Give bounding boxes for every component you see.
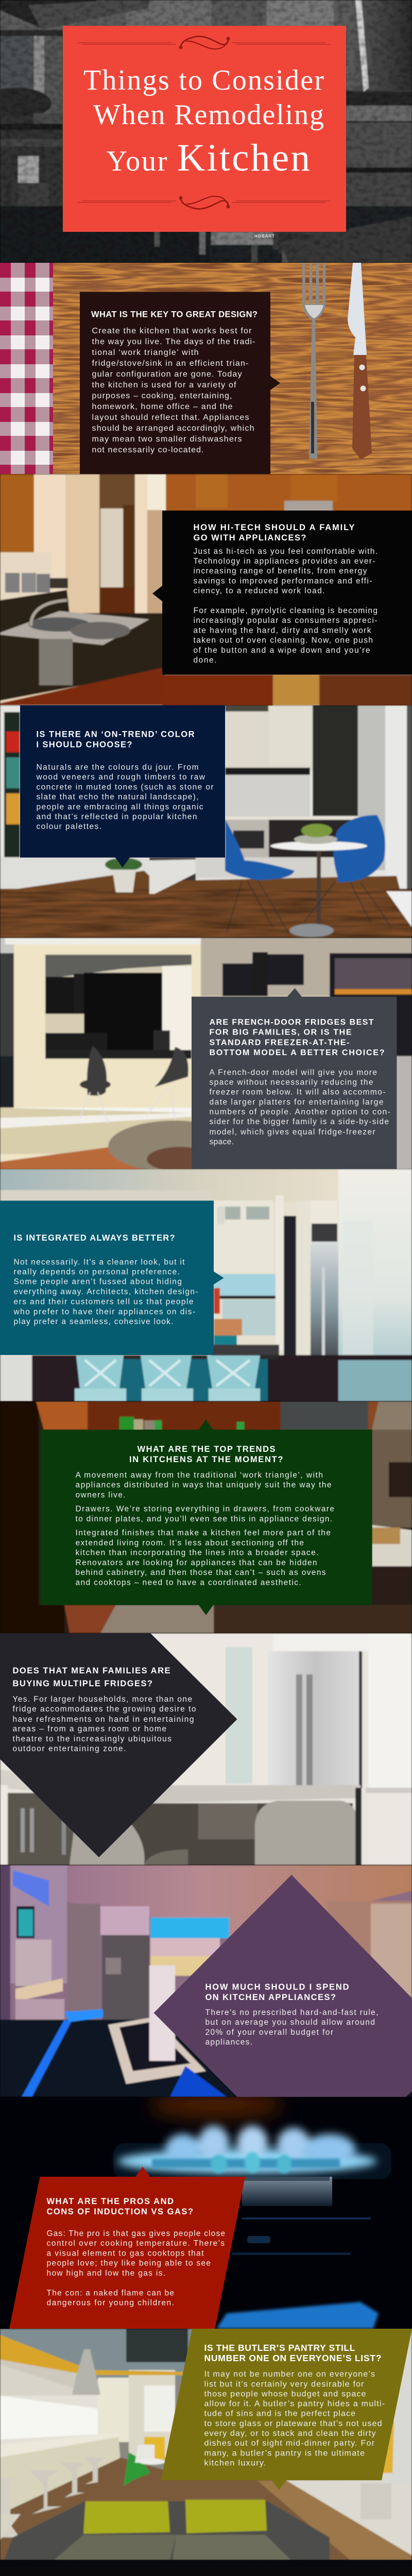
heading: HOW HI-TECH SHOULD A FAMILY (194, 523, 354, 532)
body text: people love; they like being able to see (46, 2259, 211, 2268)
arrow (214, 1272, 224, 1284)
body text: a visual element to gas cooktops that (46, 2249, 204, 2258)
heading: IS INTEGRATED ALWAYS BETTER? (13, 1233, 175, 1243)
heading: FOR BIG FAMILIES, OR IS THE (209, 1028, 352, 1037)
heading: GO WITH APPLIANCES? (194, 533, 306, 543)
body text (92, 327, 255, 454)
body text: model, which gives equal fridge-freezer (209, 1128, 375, 1137)
section: french-door fridges (0, 938, 412, 1172)
heading: NUMBER ONE ON EVERYONE’S LIST? (204, 2353, 381, 2363)
body text: ers and their customers tell us that people (13, 1297, 194, 1307)
heading: IS THE BUTLER’S PANTRY STILL (204, 2343, 355, 2353)
body text: Yes. For larger households, more than one (12, 1695, 192, 1704)
body text: people are embracing all things organic (36, 803, 203, 811)
heading: HOW MUCH SHOULD I SPEND (205, 1982, 349, 1992)
body text: 20% of your overall budget for (205, 2028, 333, 2037)
photo: industrial kitchen (0, 0, 412, 263)
panel: on-trend color (20, 705, 225, 868)
panel: great design (80, 292, 280, 474)
body text (13, 1258, 198, 1326)
photo: office kitchen with yellow sofa cushions (0, 2329, 412, 2560)
body text (12, 1695, 196, 1753)
body text: slate that echo the natural landscape), (36, 792, 199, 802)
arrow down (199, 1605, 213, 1615)
body text: who prefer to have their appliances on dis- (13, 1308, 195, 1316)
body text: outdoor entertaining zone. (12, 1744, 126, 1753)
photo: white kitchen with steel fridge (0, 1633, 412, 1865)
photo: modern kitchen with blue chairs (0, 705, 412, 938)
body text: space. (209, 1138, 234, 1146)
heading: BOTTOM MODEL A BETTER CHOICE? (209, 1048, 384, 1057)
body text: may mean two smaller dishwashers (92, 435, 242, 444)
body text: space without necessarily reducing the (209, 1078, 373, 1087)
arrow (270, 376, 280, 390)
body text: kitchen luxury. (204, 2459, 266, 2468)
body text: There’s no prescribed hard-and-fast rule, (205, 2008, 378, 2017)
heading: ON KITCHEN APPLIANCES? (205, 1993, 336, 2002)
body text: behind cabinetry, and then those that can’t – such as ovens (75, 1568, 326, 1577)
heading: WHAT IS THE KEY TO GREAT DESIGN? (91, 310, 258, 319)
heading: WHAT ARE THE PROS AND (46, 2197, 174, 2206)
body text (75, 1471, 334, 1587)
arrow up (199, 1420, 213, 1430)
body text: It may not be number one on everyone’s (204, 2370, 375, 2379)
bottom ornament (77, 196, 331, 209)
body text: control over cooking temperature. There’s (46, 2239, 225, 2248)
body text (194, 547, 377, 665)
body text: sider for the bigger family is a side-by-side (209, 1117, 389, 1126)
body text: For example, pyrolytic cleaning is becoming (194, 606, 377, 615)
section: top trends (0, 1401, 412, 1633)
photo: wooden table (0, 263, 412, 474)
heading (205, 1982, 349, 2002)
body text: extended living room. It’s less about sectioning off the (75, 1538, 304, 1548)
heading (194, 523, 354, 543)
section: integrated (0, 1169, 412, 1401)
body text: should be arranged accordingly, which (92, 424, 254, 433)
heading: IS THERE AN ‘ON-TREND’ COLOR (36, 730, 195, 739)
section: butler's pantry (0, 2329, 412, 2560)
arrow (287, 988, 302, 996)
body text (46, 2229, 225, 2307)
body text (36, 763, 213, 831)
photo: industrial kitchen: HOBART (254, 234, 274, 239)
body text: Create the kitchen that works best for (92, 327, 252, 335)
photo: white and teal kitchen (0, 1169, 412, 1401)
section: induction vs gas (0, 2090, 412, 2329)
body text (205, 2008, 378, 2046)
section: footer (0, 2560, 412, 2576)
body text: Not necessarily. It’s a cleaner look, but it (13, 1258, 185, 1266)
body text: allow for it. A butler’s pantry hides a multi- (204, 2400, 385, 2408)
body text: tude of sins and is the perfect place (204, 2409, 355, 2418)
body text: done. (194, 656, 216, 665)
panel: top trends (40, 1420, 372, 1615)
body text: Just as hi-tech as you feel comfortable with. (194, 547, 377, 556)
body text: appliances. (205, 2038, 252, 2046)
section: key to great design (0, 263, 412, 474)
title text: Kitchen (177, 137, 310, 179)
body text: ciency, to a reduced work load. (194, 586, 324, 596)
body text: dishes out of sight mid-dinner party. For (204, 2439, 375, 2448)
heading: DOES THAT MEAN FAMILIES ARE (12, 1666, 170, 1675)
body text: not necessarily co-located. (92, 446, 204, 454)
body text: A movement away from the traditional ‘work triangle’, with (75, 1471, 323, 1480)
arrow (135, 2167, 150, 2177)
body text (204, 2370, 385, 2468)
heading (36, 730, 195, 749)
body text: A French-door model will give you more (209, 1069, 377, 1077)
panel: induction vs gas (9, 2167, 245, 2329)
title text: When Remodeling (93, 99, 324, 131)
body text: Drawers. We’re storing everything in drawers, from cookware (75, 1504, 334, 1514)
body text: of the button and a wipe down and you’re (194, 646, 370, 655)
body text: fridge accommodates the growing desire to (12, 1705, 196, 1714)
heading (129, 1445, 283, 1464)
body text: Some people aren’t fussed about hiding (13, 1278, 182, 1286)
photo: kitchen with blue led lighting (0, 1865, 412, 2097)
body text: dangerous for young children. (46, 2299, 174, 2307)
body text: Naturals are the colours du jour. From (36, 763, 199, 772)
body text: homework, home office – and the (92, 402, 233, 411)
heading: BUYING MULTIPLE FRIDGES? (12, 1679, 152, 1688)
section: multiple fridges (0, 1633, 412, 1865)
photo: wood cabinet kitchen (0, 474, 412, 706)
body text: everything away. Architects, kitchen design- (13, 1287, 198, 1296)
panel: hi-tech (152, 511, 412, 675)
body text: every day, or to stack and clean the dirty (204, 2429, 376, 2438)
body text: numbers of people. Another option to con- (209, 1108, 390, 1116)
body text: layout should reflect that. Appliances (92, 413, 249, 422)
body text: Technology in appliances provides an ever- (194, 557, 375, 566)
body text: fridge/stove/sink in an efficient trian- (92, 359, 248, 368)
body text: the kitchen is used for a variety of (92, 381, 236, 389)
body text: and cooktops – need to have a coordinated aesthetic. (75, 1579, 301, 1587)
body text: purposes – cooking, entertaining, (92, 392, 232, 400)
heading: STANDARD FREEZER-AT-THE- (209, 1039, 349, 1047)
icon: knife (348, 263, 372, 460)
body text: increasing range of benefits, from energy (194, 567, 367, 575)
body text: kitchen than incorporating the lines into a broader space. (75, 1549, 318, 1557)
body text: gular configuration are gone. Today (92, 370, 242, 379)
panel: budget (153, 1875, 412, 2097)
body text: Gas: The pro is that gas gives people close (46, 2229, 225, 2238)
section: hi-tech appliances (0, 474, 412, 706)
heading: CONS OF INDUCTION VS GAS? (46, 2207, 193, 2216)
section: on-trend color (0, 705, 412, 938)
heading: WHAT ARE THE TOP TRENDS (137, 1445, 275, 1454)
heading (46, 2197, 193, 2216)
panel: integrated (0, 1200, 224, 1355)
body text: play prefer a seamless, cohesive look. (13, 1317, 173, 1326)
body text: and that’s reflected in popular kitchen (36, 812, 197, 821)
title text: Things to Consider (83, 64, 324, 96)
icon: fork (302, 263, 325, 459)
body text: colour palettes. (36, 822, 101, 831)
napkin: gingham (0, 263, 53, 474)
photo: gas burner flame (109, 2097, 391, 2329)
panel: french-door fridges (192, 988, 397, 1170)
body text: date larger platters for entertaining large (209, 1098, 383, 1107)
body text: taken out of oven cleaning. Now, one push (194, 636, 373, 645)
body text: appliances distributed in ways that uniquely suit the way the (75, 1481, 332, 1489)
photo: dark wood kitchen (0, 1401, 412, 1633)
body text: owners live. (75, 1491, 126, 1499)
body text: the way you live. The days of the tradi- (92, 337, 255, 346)
body text: tional ‘work triangle’ with (92, 348, 199, 357)
panel: butler's pantry (161, 2329, 412, 2490)
title text (83, 64, 324, 179)
body text: wood veneers and rough timbers to raw (36, 773, 205, 782)
body text: how high and low the gas is. (46, 2269, 165, 2278)
heading (209, 1018, 384, 1057)
photo: cream room with black kitchen (0, 938, 412, 1172)
body text: many, a butler’s pantry is the ultimate (204, 2449, 365, 2458)
body text: really depends on personal preference. (13, 1267, 180, 1277)
body text: increasingly popular as consumers appreci- (194, 616, 377, 625)
section: budget (0, 1865, 412, 2097)
panel: multiple fridges (0, 1633, 237, 1857)
top ornament (77, 37, 331, 49)
heading (204, 2343, 381, 2363)
body text: to dinner plates, and you’ll even see this in appliance design. (75, 1515, 332, 1523)
heading: IN KITCHENS AT THE MOMENT? (129, 1455, 283, 1464)
body text: Renovators are looking for appliances that can be hidden (75, 1558, 317, 1567)
body text: Integrated finishes that make a kitchen feel more part of the (75, 1529, 331, 1537)
body text: areas – from a games room or home (12, 1725, 166, 1733)
arrow (152, 586, 162, 601)
body text: theatre to the increasingly ubiquitous (12, 1735, 171, 1743)
section: header (0, 0, 412, 263)
body text: concrete in muted tones (such as stone or (36, 783, 213, 791)
body text: savings to improved performance and effi- (194, 577, 372, 585)
heading: I SHOULD CHOOSE? (36, 740, 132, 749)
body text: have refreshments on hand in entertaining (12, 1715, 194, 1724)
body text: list but it’s certainly very desirable for (204, 2380, 364, 2388)
body text: The con: a naked flame can be (46, 2289, 174, 2298)
body text (209, 1069, 390, 1146)
heading (12, 1666, 170, 1688)
body text: to store glass or plateware that’s not used (204, 2419, 382, 2428)
arrow (272, 2480, 286, 2490)
title text: Your (106, 145, 167, 177)
body text: freezer room below. It will also accommo- (209, 1088, 385, 1096)
body text: ate having the hard, dirty and smelly work (194, 626, 371, 635)
body text: but on average you should allow around (205, 2018, 375, 2027)
body text: those people whose budget and space (204, 2389, 366, 2399)
title card (63, 26, 346, 232)
arrow (115, 857, 130, 868)
photo: dark coffee mug background (0, 2560, 412, 2576)
heading: ARE FRENCH-DOOR FRIDGES BEST (209, 1018, 374, 1027)
